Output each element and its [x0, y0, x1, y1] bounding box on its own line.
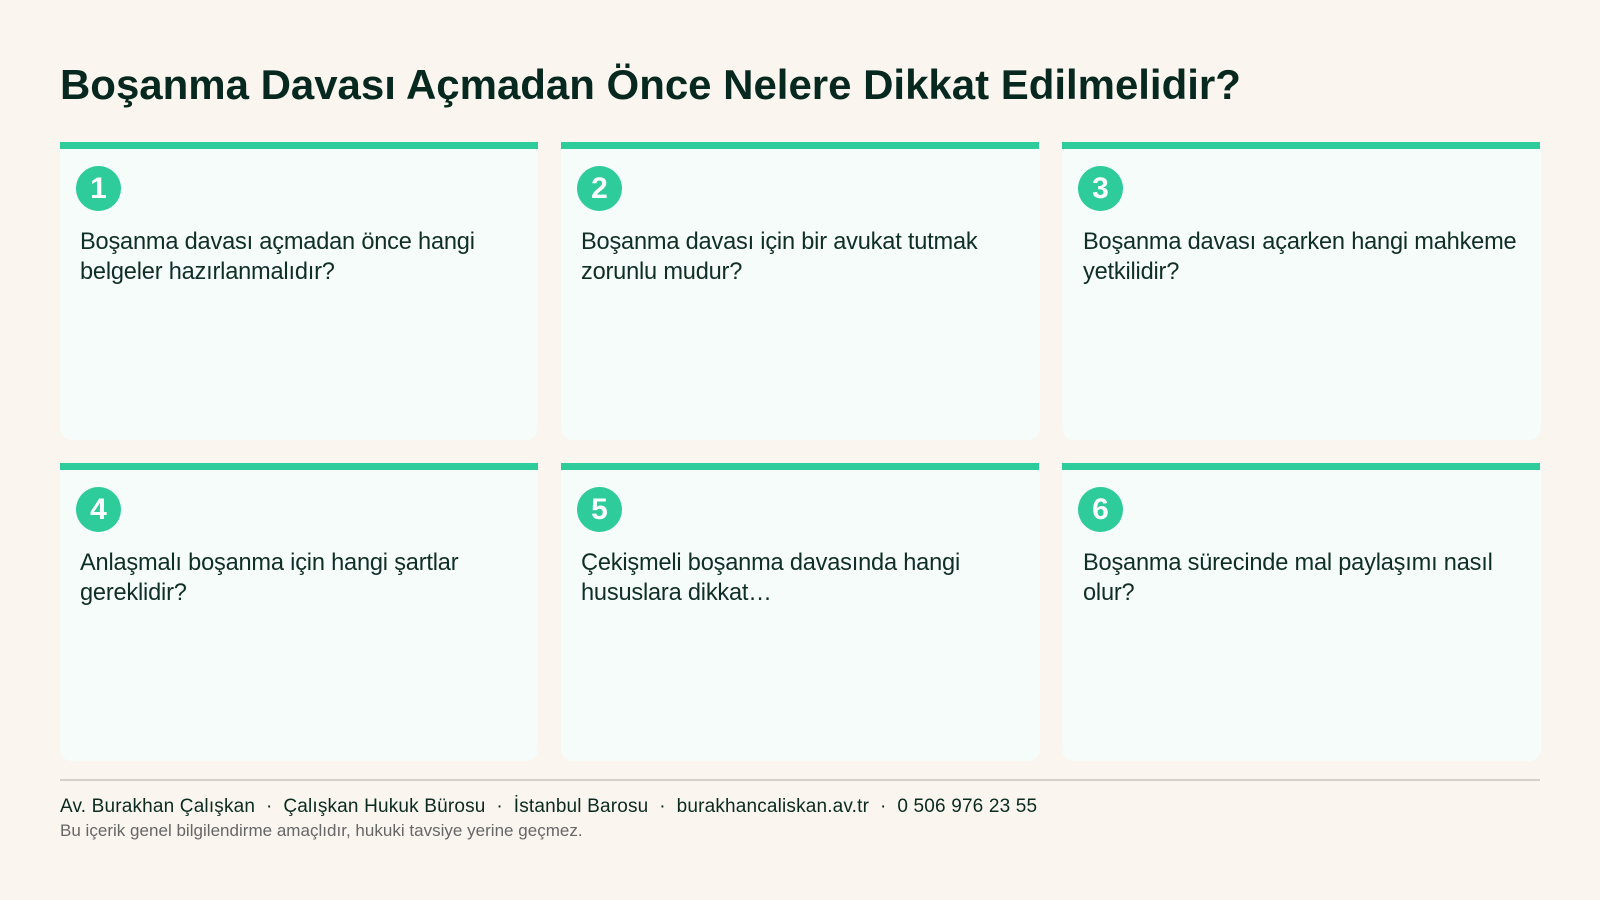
number badge 1: 1	[90, 172, 107, 205]
number badge 6: 6	[1092, 493, 1109, 526]
question 5: Çekişmeli boşanma davasında hangi	[581, 550, 960, 576]
question 3	[1083, 229, 1516, 285]
question 5: hususlara dikkat…	[581, 580, 772, 606]
title: Boşanma Davası Açmadan Önce Nelere Dikkat Edilmelidir?	[60, 61, 1241, 108]
question 6	[1083, 550, 1493, 606]
number badge 1	[76, 166, 121, 211]
panel: card 2	[561, 142, 1040, 440]
question 6: olur?	[1083, 580, 1134, 606]
number badge 5: 5	[591, 493, 608, 526]
panel: card 1	[60, 142, 538, 440]
panel: card 5	[561, 463, 1040, 761]
number badge 3: 3	[1092, 172, 1109, 205]
question 1	[80, 229, 475, 285]
question 3: Boşanma davası açarken hangi mahkeme	[1083, 229, 1516, 255]
question 6: Boşanma sürecinde mal paylaşımı nasıl	[1083, 550, 1493, 576]
number badge 5	[577, 487, 622, 532]
question 1: Boşanma davası açmadan önce hangi	[80, 229, 475, 255]
question 4: gereklidir?	[80, 580, 187, 606]
question 3: yetkilidir?	[1083, 259, 1179, 285]
question 2: Boşanma davası için bir avukat tutmak	[581, 229, 978, 255]
number badge 2: 2	[591, 172, 608, 205]
question 1: belgeler hazırlanmalıdır?	[80, 259, 335, 285]
panel: card 3	[1062, 142, 1541, 440]
footer contact line: Av. Burakhan Çalışkan · Çalışkan Hukuk Bürosu · İstanbul Barosu · burakhancaliskan.av.tr · 0 506 976 23 55	[60, 796, 1037, 817]
number badge 4: 4	[90, 493, 107, 526]
number badge 4	[76, 487, 121, 532]
disclaimer: Bu içerik genel bilgilendirme amaçlıdır, hukuki tavsiye yerine geçmez.	[60, 821, 583, 840]
number badge 2	[577, 166, 622, 211]
question 4: Anlaşmalı boşanma için hangi şartlar	[80, 550, 458, 576]
question 2	[581, 229, 978, 285]
question 4	[80, 550, 458, 606]
panel: card 4	[60, 463, 538, 761]
question 5	[581, 550, 960, 606]
question 2: zorunlu mudur?	[581, 259, 742, 285]
number badge 3	[1078, 166, 1123, 211]
number badge 6	[1078, 487, 1123, 532]
panel: card 6	[1062, 463, 1541, 761]
